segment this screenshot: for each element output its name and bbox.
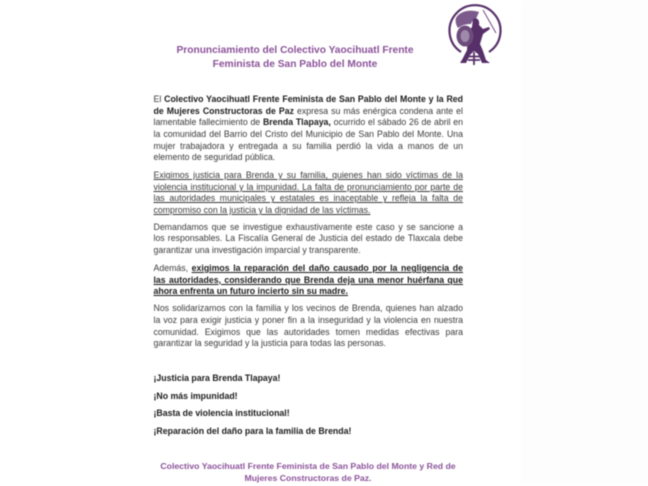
text block: slogans: ¡Basta de violencia institucional! [154, 408, 290, 418]
logo shield [456, 26, 474, 46]
text block: solidarity paragraph: garantizar la seguridad y la justicia para todas las personas. [154, 338, 386, 348]
text block: demand for investigation [153, 222, 464, 256]
text block: opening paragraph: de Mujeres Constructoras de Paz expresa su más enérgica condena ante el [154, 106, 463, 116]
text block: demand for justice, underlined: compromiso con la justicia y la dignidad de las víctimas. [154, 205, 370, 215]
text block: demand for reparation, bold underlined: las autoridades, considerando que Brenda deja una menor huérfana que [154, 275, 463, 285]
text block: opening paragraph: elemento de seguridad pública. [154, 152, 275, 162]
text block: slogans [154, 373, 352, 437]
title [176, 44, 414, 70]
text block: solidarity paragraph: la voz para exigir justicia y poner fin a la inseguridad y la violencia en nuestra [154, 315, 463, 325]
footer signature: Colectivo Yaocihuatl Frente Feminista de San Pablo del Monte y Red de [160, 461, 456, 471]
text block: demand for investigation: Demandamos que se investigue exhaustivamente este caso y se sancione a [154, 222, 463, 232]
text block: opening paragraph: lamentable fallecimiento de Brenda Tlapaya, ocurrido el sábado 26 de abril en [154, 117, 463, 127]
logo ring [450, 5, 501, 52]
text block: solidarity paragraph: Nos solidarizamos con la familia y los vecinos de Brenda, quienes han alzado [154, 303, 463, 313]
logo warrior figure [460, 18, 490, 63]
text block: opening paragraph: El Colectivo Yaocihuatl Frente Feminista de San Pablo del Monte y la Red [154, 94, 463, 104]
title: Pronunciamiento del Colectivo Yaocihuatl Frente [176, 45, 414, 56]
footer signature [160, 461, 456, 484]
text block: demand for investigation: los responsables. La Fiscalía General de Justicia del estado de Tlaxcala debe [154, 233, 463, 243]
text block: demand for justice, underlined [152, 170, 464, 216]
logo spear [483, 10, 496, 33]
text block: opening paragraph: mujer trabajadora y entregada a su familia perdió la vida a manos de un [154, 141, 463, 151]
text block: demand for reparation, bold underlined [152, 263, 464, 297]
text block: opening paragraph [153, 94, 464, 163]
icon: Yaocihuatl warrior logo [448, 3, 502, 66]
logo feather headdress [456, 11, 479, 28]
text block: demand for justice, underlined: las autoridades municipales y estatales es inaceptable y refleja la falta de [154, 193, 463, 203]
text block: demand for reparation, bold underlined: Además, exigimos la reparación del daño causado por la negligencia de [154, 263, 463, 273]
text block: slogans: ¡Reparación del daño para la familia de Brenda! [154, 426, 351, 436]
text block: slogans: ¡No más impunidad! [154, 391, 238, 401]
text block: demand for reparation, bold underlined: ahora enfrenta un futuro incierto sin su madre. [154, 286, 348, 296]
text block: opening paragraph: la comunidad del Barrio del Cristo del Municipio de San Pablo del Monte. Una [154, 129, 463, 139]
text block: demand for justice, underlined: violencia institucional y la impunidad. La falta de pronunciamiento por parte de [154, 182, 463, 192]
text block: demand for investigation: garantizar una investigación imparcial y transparente. [154, 245, 361, 255]
logo feminist cross [468, 52, 480, 65]
title: Feminista de San Pablo del Monte [213, 59, 377, 70]
text block: solidarity paragraph: comunidad. Exigimos que las autoridades tomen medidas efectivas para [154, 327, 463, 337]
text block: demand for justice, underlined: Exigimos justicia para Brenda y su familia, quienes han sido víctimas de la [154, 170, 463, 180]
text block: slogans: ¡Justicia para Brenda Tlapaya! [154, 373, 280, 383]
text block: solidarity paragraph [153, 303, 464, 349]
footer signature: Mujeres Constructoras de Paz. [244, 473, 371, 483]
